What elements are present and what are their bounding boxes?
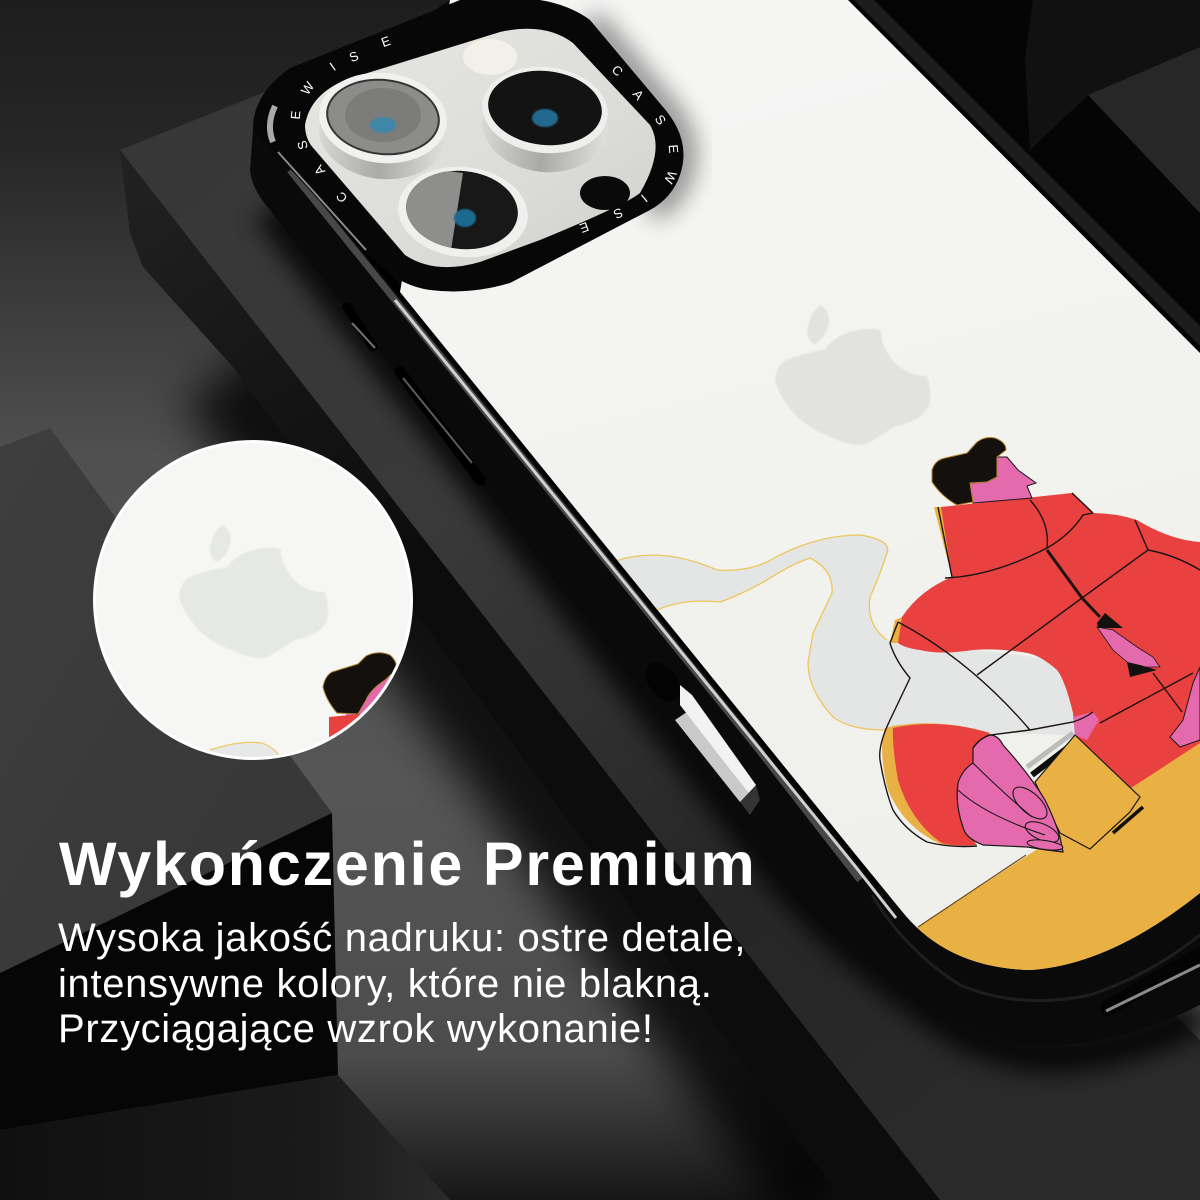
- brand ring text: E: [577, 219, 591, 236]
- glass area: [305, 29, 656, 267]
- brand ring text: E: [666, 144, 681, 154]
- brand ring text: S: [294, 139, 311, 151]
- island frame: [253, 0, 684, 291]
- red jacket: [882, 493, 1200, 846]
- brand ring text: A: [311, 162, 328, 178]
- jacket outlines: [880, 493, 1200, 846]
- apple logo on phone: [775, 305, 930, 445]
- body text: intensywne kolory, które nie blakną.: [58, 962, 712, 1006]
- circle apple logo: [179, 525, 328, 658]
- illustration: man in red jacket: [613, 438, 1200, 1000]
- white printed phone back: [400, 0, 1200, 970]
- brand ring text: C: [609, 62, 626, 79]
- sensor hole: [580, 176, 630, 210]
- left lens: [315, 67, 451, 185]
- yellow mug: [1035, 735, 1140, 849]
- zoom detail circle: [93, 440, 413, 770]
- flash: [463, 39, 517, 75]
- brand ring text: A: [630, 87, 647, 103]
- right hand: [1170, 667, 1200, 747]
- body text: Przyciągające wzrok wykonanie!: [58, 1007, 654, 1051]
- right lens: [477, 61, 613, 178]
- brand ring text: [288, 33, 681, 236]
- shadow around camera island: [590, 20, 684, 210]
- brand ring text: W: [298, 78, 317, 98]
- circle hair and jacket: [210, 652, 396, 757]
- brand ring text: E: [288, 110, 303, 120]
- body text: Wysoka jakość nadruku: ostre detale,: [58, 916, 746, 960]
- camera island: [253, 0, 684, 291]
- thumb: [1073, 712, 1099, 740]
- chrome side button: [638, 656, 760, 815]
- man's head: [932, 438, 1036, 505]
- phone case body: [250, 0, 1200, 1045]
- brand ring text: I: [638, 191, 651, 205]
- yellow table: [918, 743, 1200, 970]
- bottom charging slot: [1106, 955, 1200, 1011]
- brand ring text: W: [661, 168, 680, 187]
- steam: [613, 535, 1078, 735]
- brand ring text: S: [652, 112, 669, 128]
- mug rim: [1027, 733, 1075, 775]
- title: Wykończenie Premium: [59, 830, 757, 898]
- bottom lens: [398, 166, 528, 258]
- brand ring text: S: [347, 48, 361, 65]
- brand ring text: S: [611, 205, 625, 222]
- small face in jacket: [1097, 613, 1160, 677]
- volume and mute slots: [347, 307, 480, 480]
- pink hand: [957, 735, 1063, 852]
- brand ring text: E: [379, 33, 393, 50]
- brand ring text: I: [327, 59, 338, 74]
- brand ring text: C: [333, 189, 350, 206]
- body text: [58, 916, 746, 1051]
